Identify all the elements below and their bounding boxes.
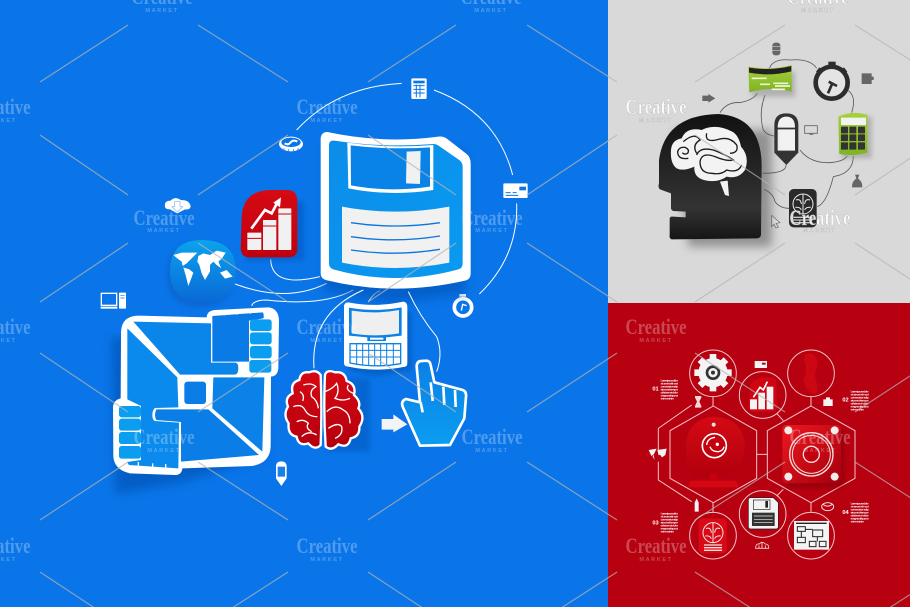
sticker: computer with keyboard [344,302,412,377]
watermarks: Creative Market: MARKET [639,557,673,563]
icon: small card [755,361,767,368]
icon: cloud network [756,542,769,548]
icon: stopwatch [816,62,848,99]
label: 03 and text: 03 [652,520,659,526]
icon: stopwatch [454,294,472,316]
sticker: interlocked hands [112,307,279,494]
label: 04 and text: sit amet elit sed [851,505,869,509]
icon: bank card [503,183,528,198]
panel: lower connectors and small pencil [276,290,440,486]
label: 04 and text [842,502,869,524]
icon: floppy disk [748,498,778,529]
watermarks: Creative Market: Creative [462,424,523,449]
icon: wallet [862,73,874,84]
label: 01 and text: Lorem ipsum dolor [661,378,679,382]
icon: globe sticker [167,240,236,307]
label: 02 and text: 02 [842,398,849,404]
label: 03 and text: Lorem ipsum dolor [661,512,679,516]
watermarks: Creative Market: MARKET [310,338,344,344]
label: 01 and text: eiusmod tempor [661,387,679,391]
sticker: pointing hand [402,361,466,446]
icon: coin stack [822,503,834,511]
label: 03 and text: ut labore et dolor [661,524,679,528]
panel: gray connectors and icons [702,43,874,228]
icon: pencil [695,498,699,512]
icon: webcam [686,417,745,487]
icon: hourglass [695,396,701,408]
sticker: brain badge [789,189,817,227]
icon: cloud download [165,198,191,213]
watermarks: Creative Market: MARKET [803,228,837,234]
label: 02 and text: consectetur adip [851,396,869,400]
label: 02 and text: ut labore et dolor [851,402,869,406]
label: 03 and text: eiusmod tempor [661,521,679,525]
watermarks: Creative Market: MARKET [639,338,673,344]
panel: red background [608,303,910,607]
watermarks: Creative Market: Creative [462,205,523,230]
connector curves lower [314,290,440,372]
icon: database [772,43,780,55]
label: 01 and text: enim minim [661,396,674,400]
icon: monitor [805,126,817,134]
watermarks: Creative Market: MARKET [475,228,509,234]
watermarks: Creative Market: MARKET [310,557,344,563]
label: 01 and text: consectetur adip [661,384,678,388]
icon: speaker [782,425,844,488]
label: 01 and text: sit amet elit sed [661,381,678,385]
label: 04 and text: consectetur adip [851,508,869,512]
sticker: head with brain [659,114,772,247]
watermarks: Creative Market: MARKET [310,118,344,124]
icon: gear [694,354,732,391]
watermarks: Creative Market: MARKET [475,448,509,454]
watermarks: Creative Market: MARKET [147,228,181,234]
watermarks: Creative Market: MARKET [803,448,837,454]
label: 02 and text: eiusmod tempor [851,399,869,403]
watermarks: Creative Market: MARKET [145,8,179,14]
hexagon frames and connectors [658,350,855,559]
label: 03 and text: consectetur adip [661,518,678,522]
icon: calculator [411,78,427,99]
label: 01 and text: ut labore et dolor [661,390,679,394]
label: 03 and text: magna aliqua ut [661,527,678,531]
label: 01 and text: magna aliqua ut [661,393,678,397]
icon: red chart [749,377,777,412]
label: 03 and text: sit amet elit sed [661,515,678,519]
watermarks: Creative Market: MARKET [474,8,508,14]
sticker: floppy disk [321,132,471,304]
label: 02 and text: Lorem ipsum dolor [851,390,869,394]
panel: gray background [608,0,910,303]
watermarks: Creative Market: Creative [626,314,687,339]
panel: red hexagon infographic [649,350,869,559]
icon: desktop computer [101,293,126,309]
label: 02 and text: magna aliqua ut [851,405,869,409]
watermarks: Creative Market: Creative [626,533,687,558]
label: 02 and text [842,390,869,412]
panel: computer, brain and pointer group [285,302,466,452]
label: 04 and text: ut labore et dolor [851,514,869,518]
label: 04 and text: 04 [842,510,849,516]
sticker: green calculator [838,113,872,158]
connectors [720,60,854,208]
icon: red brain sticker [285,371,370,452]
icon: brain card [699,518,727,553]
watermarks: Creative Market: Creative [134,205,195,230]
watermarks: Creative Market: Creative [296,533,358,558]
watermarks: Creative Market: Creative [296,94,358,119]
panel: chart, globe, coin and cloud group [165,137,304,307]
label: 02 and text: sit amet elit sed [851,393,869,397]
watermarks: Creative Market: Creative [790,205,851,230]
watermarks: Creative Market: MARKET [639,118,673,124]
watermarks: Creative Market: Creative [296,314,358,339]
watermarks: Creative Market: Creative [626,94,687,119]
icon: flow chart [794,521,829,550]
sticker: red growth chart [241,190,304,261]
connector curves upper [235,83,517,306]
icon: cursor [772,215,780,228]
arrow [382,414,407,432]
icon: money bag [852,175,862,187]
label: 03 and text: enim minim [661,530,674,534]
icon: red S shape [803,353,818,395]
label: 04 and text: Lorem ipsum dolor [851,502,869,506]
watermarks: Creative Market: Creative [134,424,195,449]
watermarks: Creative Market: MARKET [801,8,835,14]
icon: camera case [823,397,833,406]
sticker: pencil [774,113,798,165]
panel: floppy and satellites upper group [101,78,528,316]
label: 04 and text: eiusmod tempor [851,511,869,515]
label: 03 and text [652,512,679,534]
sticker: green card [748,65,795,97]
label: 01 and text: 01 [652,386,659,392]
icon: small pencil [276,461,287,486]
watermarks: Creative Market: MARKET [147,448,181,454]
label: 01 and text [652,378,679,400]
label: 04 and text: magna aliqua ut [851,517,869,521]
panel: blue background [0,0,608,607]
icon: world map [649,449,667,460]
icon: arrow [702,94,715,103]
label: 02 and text: enim minim [851,408,864,412]
watermarks: Creative Market: Creative [790,424,851,449]
label: 04 and text: enim minim [851,520,864,524]
icon: coin [279,137,303,151]
